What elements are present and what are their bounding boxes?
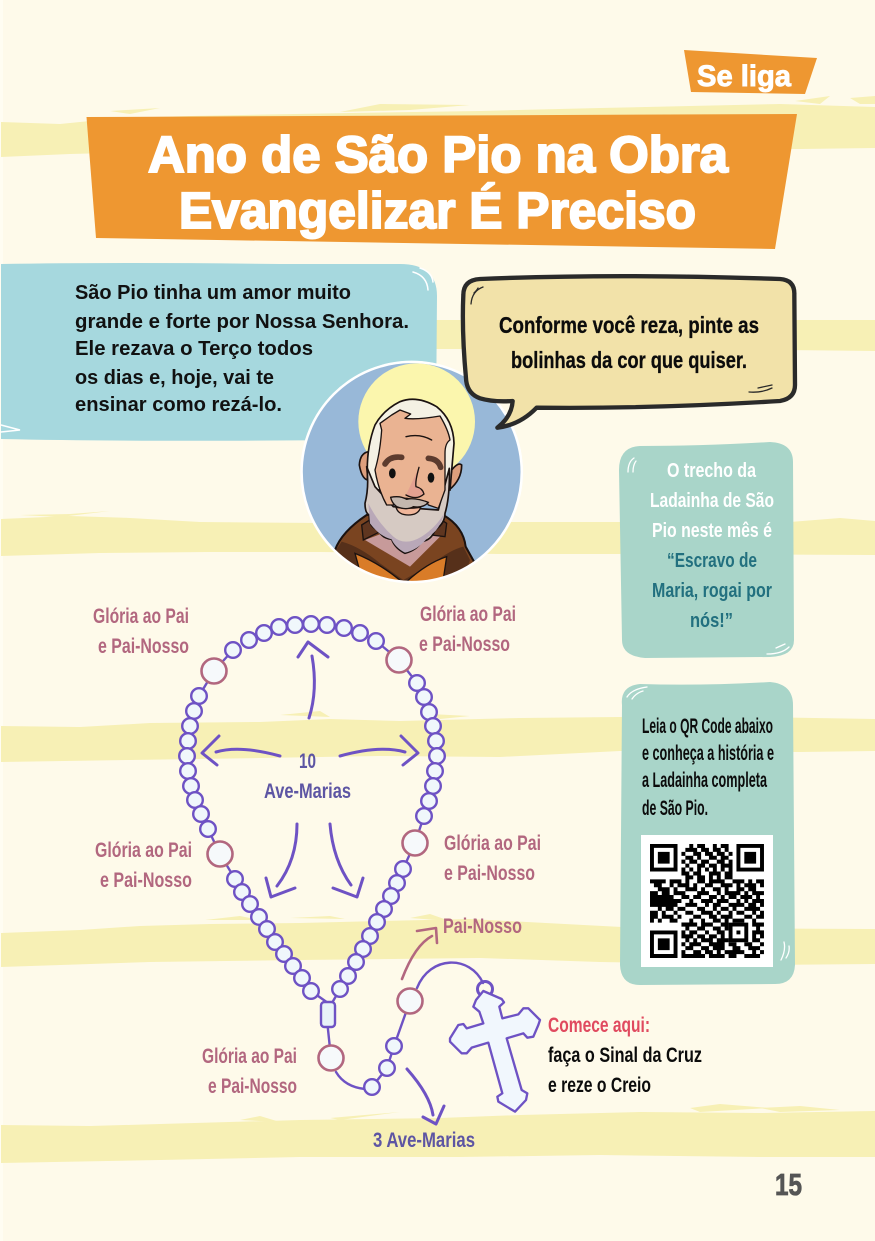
rosary centerpiece xyxy=(321,1002,335,1027)
speech bubble xyxy=(463,276,795,428)
page number: 15 xyxy=(775,1167,802,1202)
arrow: Pai-Nosso xyxy=(402,928,437,979)
label: middle left decade xyxy=(95,839,192,892)
label: 10 Ave-Marias: Ave-Marias xyxy=(264,780,351,803)
label: 10 Ave-Marias: 10 xyxy=(299,750,316,773)
panel: intro text: ensinar como rezá-lo. xyxy=(75,394,282,416)
title banner: Ano de São Pio na Obra xyxy=(148,126,729,183)
panel: Ladainha excerpt: Pio neste mês é xyxy=(652,520,772,542)
panel: intro text: os dias e, hoje, vai te xyxy=(75,367,274,389)
panel: intro text: Ele rezava o Terço todos xyxy=(75,338,313,360)
label: top right decade xyxy=(419,603,516,656)
label: 10 Ave-Marias xyxy=(264,750,351,803)
large beads xyxy=(202,648,428,1070)
panel: Ladainha excerpt: nós!” xyxy=(690,610,733,632)
panel: Ladainha excerpt xyxy=(619,442,794,658)
callout: start here: e reze o Creio xyxy=(548,1074,651,1097)
label: top right decade: e Pai-Nosso xyxy=(419,633,510,656)
label: top right decade: Glória ao Pai xyxy=(420,603,516,626)
panel: QR code card: e conheça a história e xyxy=(642,742,774,765)
panel: QR code card: Leia o QR Code abaixo xyxy=(642,715,773,738)
tag: Se liga: Se liga xyxy=(697,60,791,93)
panel: QR code card: a Ladainha completa xyxy=(642,769,767,792)
title banner xyxy=(86,114,797,249)
label: 3 Ave-Marias: 3 Ave-Marias xyxy=(373,1129,475,1152)
panel: Ladainha excerpt: “Escravo de xyxy=(667,550,757,572)
panel: intro text xyxy=(1,263,437,441)
label: bottom decade xyxy=(202,1045,297,1098)
callout: start here: Comece aqui: xyxy=(548,1014,650,1037)
label: middle right decade: Glória ao Pai xyxy=(444,832,541,855)
label: middle right decade xyxy=(444,832,541,885)
label: bottom decade: e Pai-Nosso xyxy=(208,1075,297,1098)
panel: Ladainha excerpt: Maria, rogai por xyxy=(652,580,772,602)
label: bottom decade: Glória ao Pai xyxy=(202,1045,297,1068)
cross ring xyxy=(478,982,492,996)
label: top left decade xyxy=(93,605,189,658)
label: middle left decade: e Pai-Nosso xyxy=(100,869,192,892)
tag: Se liga xyxy=(684,50,817,94)
rosary cord xyxy=(199,641,483,1089)
label: top left decade: Glória ao Pai xyxy=(93,605,189,628)
speech bubble: bolinhas da cor que quiser. xyxy=(511,347,747,373)
callout: start here: faça o Sinal da Cruz xyxy=(548,1044,702,1067)
label: middle left decade: Glória ao Pai xyxy=(95,839,192,862)
rosary xyxy=(179,616,540,1112)
panel: Ladainha excerpt: O trecho da xyxy=(667,460,757,482)
small beads xyxy=(179,616,445,1095)
panel: intro text: São Pio tinha um amor muito xyxy=(75,282,351,304)
callout: start here xyxy=(548,1014,702,1097)
label: top left decade: e Pai-Nosso xyxy=(98,635,189,658)
arrows: ten Hail Marys directions xyxy=(202,642,444,1124)
icon: cross xyxy=(450,991,540,1112)
panel: QR code card: de São Pio. xyxy=(642,797,708,820)
icon: QR code xyxy=(641,835,773,967)
speech bubble: Conforme você reza, pinte as xyxy=(499,312,759,338)
label: middle right decade: e Pai-Nosso xyxy=(444,862,535,885)
character: São Pio portrait xyxy=(300,361,523,590)
panel: Ladainha excerpt: Ladainha de São xyxy=(650,490,774,512)
label: Pai-Nosso: Pai-Nosso xyxy=(443,915,522,938)
title banner: Evangelizar É Preciso xyxy=(179,182,696,239)
panel: intro text: grande e forte por Nossa Senhora. xyxy=(75,311,409,333)
panel: QR code card xyxy=(620,682,795,985)
